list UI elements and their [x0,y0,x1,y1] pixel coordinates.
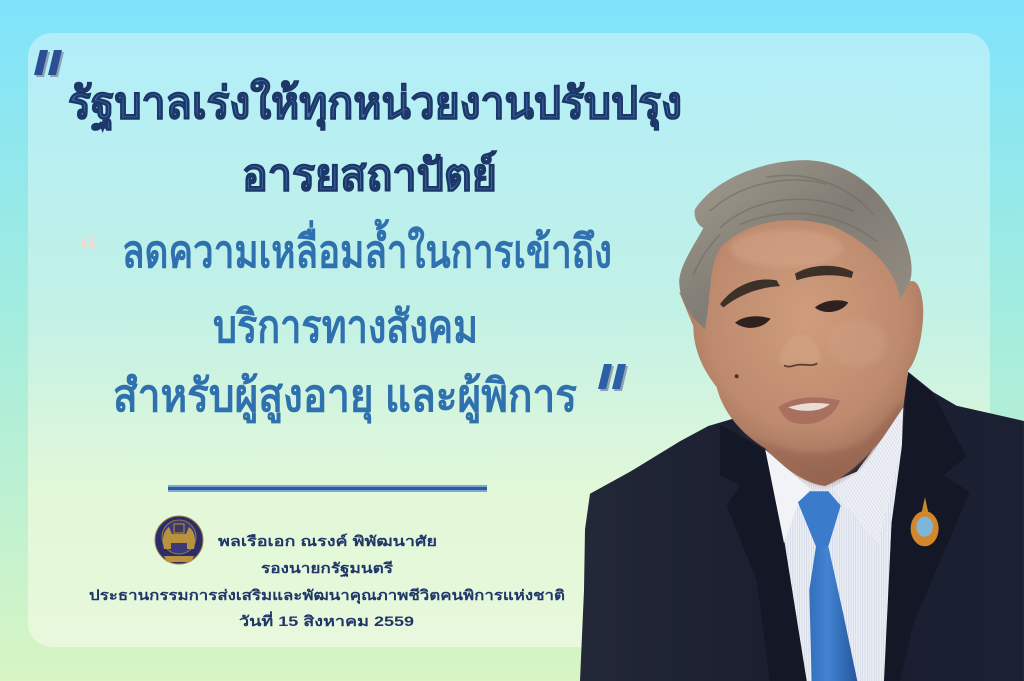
subtitle: reduce inequality in access [113,218,612,424]
subtitle: reduce inequality in access: บริการทางสังคม [213,301,478,352]
eyes [735,316,771,328]
title: government urges agencies [68,77,682,200]
right cheek highlight [827,319,887,367]
title: government urges agencies: รัฐบาลเร่งให้ทุกหน่วยงานปรับปรุง [68,77,682,131]
hair streaks [693,175,877,275]
necktie knot [798,491,841,546]
title: government urges agencies: อารยสถาปัตย์ [242,150,497,200]
face and ears [679,160,923,486]
right lapel [884,374,970,681]
signature: name and titles [89,533,565,629]
neck shadow [737,401,902,486]
mole [735,374,739,378]
signature: name and titles: ประธานกรรมการส่งเสริมและพัฒนาคุณภาพชีวิตคนพิการแห่งชาติ [89,587,565,604]
hair [679,160,912,330]
divider rule [168,485,487,492]
shirt [765,407,903,681]
left lapel [720,424,807,681]
signature: name and titles: รองนายกรัฐมนตรี [261,560,394,578]
signature: name and titles: วันที่ 15 สิงหาคม 2559 [239,611,414,629]
icon: faint opening quote: “ [80,226,97,284]
forehead highlight [730,230,843,267]
eyebrows [720,279,780,307]
subtitle: reduce inequality in access: สำหรับผู้สูงอายุ และผู้พิการ [113,370,577,424]
necktie [798,491,857,681]
icon: closing quotation mark [598,364,628,391]
collar left [765,450,810,543]
lapel pin [911,497,939,546]
icon: opening quotation mark [34,50,64,77]
mouth [778,397,840,424]
collar right [832,407,903,545]
portrait: man in suit [580,160,1024,681]
signature: name and titles: พลเรือเอก ณรงค์ พิพัฒนาศัย [218,533,437,549]
subtitle: reduce inequality in access: ลดความเหลื่อมล้ำในการเข้าถึง [122,218,612,277]
suit jacket [580,372,1024,681]
icon: government seal [155,516,203,564]
nose [780,334,821,366]
